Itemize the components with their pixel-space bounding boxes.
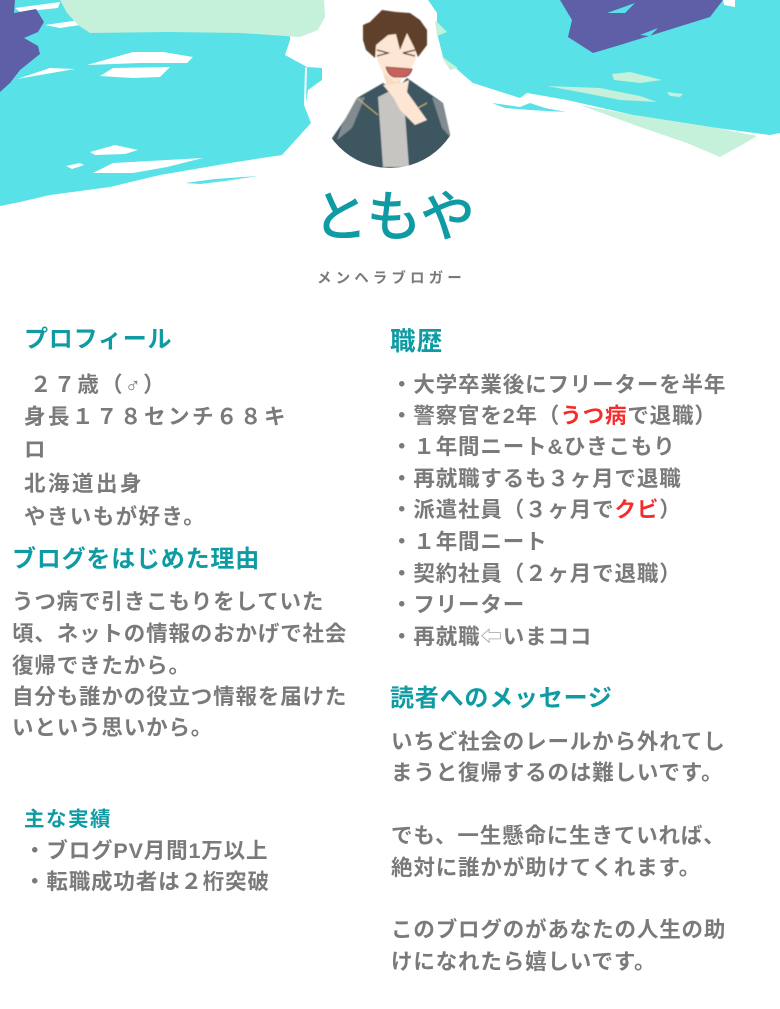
text: main achievements: ・転職成功者は２桁突破 [24, 870, 270, 894]
left mint brush stroke [60, 0, 325, 37]
text: profile: やきいもが好き。 [24, 505, 206, 529]
right purple brush stroke [560, 0, 723, 53]
left brush white gaps [15, 2, 312, 176]
text: why I started the blog: うつ病で引きこもりをしていた [12, 590, 324, 614]
heading: why I started the blog: ブログをはじめた理由 [12, 546, 260, 573]
text: profile: ロ [24, 438, 46, 462]
text: message to readers: まうと復帰するのは難しいです。 [391, 761, 723, 785]
text: career list: ・警察官を2年（うつ病で退職） [391, 404, 717, 428]
text: message to readers [391, 730, 726, 974]
heading: profile: プロフィール [24, 326, 172, 353]
name title: ともや [313, 172, 474, 252]
text: message to readers: 絶対に誰かが助けてくれます。 [391, 856, 701, 880]
text: why I started the blog: 復帰できたから。 [12, 654, 191, 678]
text: main achievements: ・ブログPV月間1万以上 [24, 839, 268, 863]
t-shirt [378, 90, 409, 167]
text: profile [24, 373, 288, 529]
text: profile: 身長１７８センチ６８キ [24, 405, 288, 429]
heading: main achievements: 主な実績 [24, 808, 112, 831]
text: why I started the blog: 自分も誰かの役立つ情報を届けた [12, 685, 347, 709]
text: career list [391, 373, 726, 649]
text: message to readers: このブログのがあなたの人生の助 [391, 918, 726, 942]
hand [383, 80, 427, 125]
text: why I started the blog: 頃、ネットの情報のおかげで社会 [12, 622, 347, 646]
text: career list: ・再就職⇦いまココ [391, 625, 592, 649]
left cyan brush stroke [0, 0, 322, 206]
text: career list: ・契約社員（２ヶ月で退職） [391, 562, 682, 586]
text: career list: ・１年間ニート [391, 530, 547, 554]
text: message to readers: いちど社会のレールから外れてし [391, 730, 726, 754]
neck [382, 72, 402, 85]
text: message to readers: でも、一生懸命に生きていれば、 [391, 824, 726, 848]
right mint brush stroke [435, 20, 757, 157]
face [375, 32, 416, 82]
eyes [377, 50, 415, 56]
brush stroke background [0, 0, 780, 206]
text: message to readers: けになれたら嬉しいです。 [391, 950, 656, 974]
jacket [330, 78, 451, 172]
hair [363, 10, 427, 58]
right brush white gaps [723, 0, 735, 7]
heading: career: 職歴 [390, 328, 443, 356]
right cyan brush stroke [428, 0, 780, 135]
text: career list: ・１年間ニート&ひきこもり [391, 435, 676, 459]
text: career list: ・大学卒業後にフリーターを半年 [391, 373, 726, 397]
text: main achievements [24, 839, 270, 894]
avatar portrait [332, 9, 451, 168]
text: why I started the blog: いという思いから。 [12, 716, 213, 740]
text: profile: ２７歳（♂） [30, 373, 167, 397]
heading: message to readers: 読者へのメッセージ [390, 685, 613, 712]
left purple brush stroke [0, 0, 44, 92]
text: why I started the blog [12, 590, 347, 740]
text: career list: ・再就職するも３ヶ月で退職 [391, 467, 682, 491]
text: profile: 北海道出身 [24, 472, 144, 496]
subtitle: メンヘラブロガー [317, 271, 466, 287]
text: career list: ・フリーター [391, 593, 525, 617]
mouth [386, 67, 412, 77]
text: career list: ・派遣社員（３ヶ月でクビ） [391, 498, 682, 522]
